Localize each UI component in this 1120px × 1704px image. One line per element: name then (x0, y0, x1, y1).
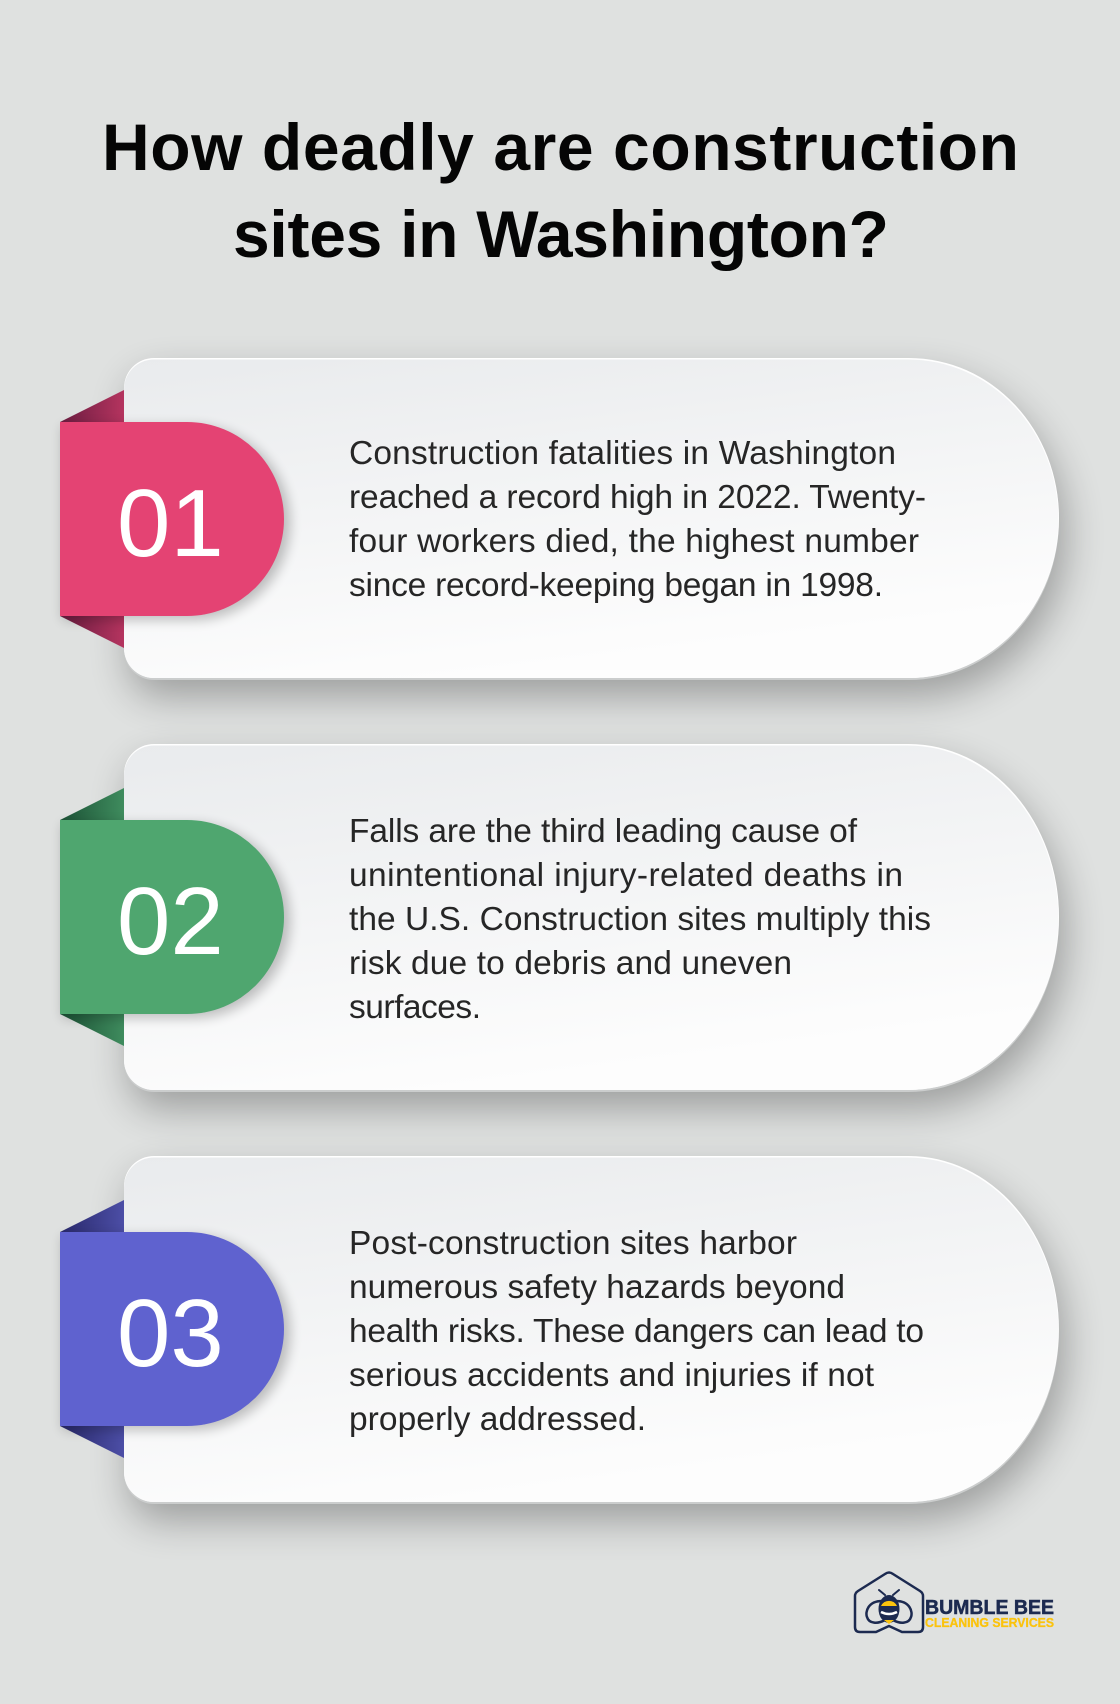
logo text: BUMBLE BEE (925, 1597, 1054, 1619)
text: step 01: since record-keeping began in 1998. (349, 567, 883, 604)
ribbon folds: step 01 (60, 390, 124, 648)
text: step 02: the U.S. Construction sites multiply this (349, 901, 931, 938)
title: sites in Washington? (233, 197, 889, 271)
text: step 03: serious accidents and injuries if not (349, 1357, 875, 1394)
text: step 03 (349, 1225, 924, 1438)
number badge: step 02 (60, 820, 290, 1018)
title (102, 110, 1019, 271)
text: step 01: four workers died, the highest number (349, 523, 919, 560)
panel: step 03 (60, 1156, 1065, 1520)
title: How deadly are construction (102, 110, 1019, 184)
text: step 02: surfaces. (349, 989, 481, 1026)
text: step 03: properly addressed. (349, 1401, 646, 1438)
number badge: step 01 (60, 422, 290, 620)
text: step 01: reached a record high in 2022. Twenty- (349, 479, 926, 516)
number badge: step 03 (60, 1232, 290, 1430)
icon: house with bee (855, 1572, 923, 1632)
text: step 03: health risks. These dangers can lead to (349, 1313, 924, 1350)
number badge: step 03: 03 (117, 1280, 224, 1387)
text: step 03: Post-construction sites harbor (349, 1225, 797, 1262)
number badge: step 01: 01 (117, 470, 224, 577)
text: step 02: risk due to debris and uneven (349, 945, 792, 982)
logo text: CLEANING SERVICES (925, 1616, 1054, 1630)
logo: Bumble Bee Cleaning Services (855, 1572, 1054, 1632)
ribbon folds: step 02 (60, 788, 124, 1046)
number badge: step 02: 02 (117, 868, 224, 975)
logo text (925, 1597, 1054, 1630)
panel: step 01 (60, 358, 1065, 696)
ribbon folds: step 03 (60, 1200, 124, 1458)
text: step 01 (349, 435, 926, 604)
text: step 02: unintentional injury-related deaths in (349, 857, 903, 894)
text: step 02 (349, 813, 931, 1026)
panel: step 02 (60, 744, 1065, 1108)
text: step 01: Construction fatalities in Washington (349, 435, 896, 472)
text: step 03: numerous safety hazards beyond (349, 1269, 845, 1306)
text: step 02: Falls are the third leading cause of (349, 813, 858, 850)
